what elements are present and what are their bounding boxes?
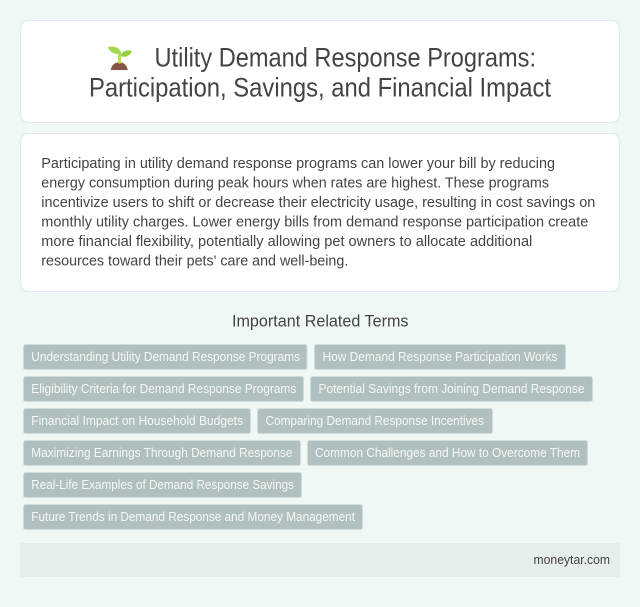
panel: related term tags (24, 344, 592, 530)
tag: potential savings (310, 376, 592, 402)
tag: eligibility criteria: Eligibility Criteria for Demand Response Programs (31, 381, 297, 396)
tag: maximizing earnings: Maximizing Earnings Through Demand Response (31, 445, 293, 460)
tag: real-life examples: Real-Life Examples of Demand Response Savings (31, 477, 294, 492)
title line 1: Utility Demand Response Programs: (154, 42, 536, 72)
tag: future trends: Future Trends in Demand Response and Money Management (31, 509, 355, 524)
description text block: resources toward their pets' care and well-being. (41, 252, 348, 270)
description text block: more financial flexibility, potentially allowing pet owners to allocate additional (41, 233, 532, 250)
tag: future trends (24, 504, 362, 530)
tag: common challenges (308, 440, 588, 466)
heading: important related terms: Important Related Terms (232, 312, 408, 330)
tag: common challenges: Common Challenges and How to Overcome Them (315, 445, 580, 460)
tag: understanding programs (24, 344, 307, 370)
description text block: energy consumption during peak hours when rates are highest. These programs (41, 174, 549, 192)
tag: comparing incentives (258, 408, 492, 434)
description text block (41, 155, 595, 270)
tag: financial impact: Financial Impact on Household Budgets (31, 413, 243, 428)
tag: financial impact (24, 408, 250, 434)
footer source text: moneytar.com (534, 552, 610, 567)
tag: eligibility criteria (24, 376, 304, 402)
tag: how participation works: How Demand Response Participation Works (322, 349, 558, 364)
panel: title card (20, 20, 620, 122)
panel: description card (20, 134, 620, 292)
tag: maximizing earnings (24, 440, 300, 466)
tag: understanding programs: Understanding Utility Demand Response Programs (31, 349, 300, 364)
tag: comparing incentives: Comparing Demand Response Incentives (266, 413, 484, 428)
tag: how participation works (314, 344, 566, 370)
description text block: monthly utility charges. Lower energy bills from demand response participation create (41, 214, 588, 230)
description text block: Participating in utility demand response programs can lower your bill by reducing (41, 155, 555, 172)
footer bar (20, 543, 620, 577)
tag: potential savings: Potential Savings from Joining Demand Response (318, 381, 584, 396)
title line 2: Participation, Savings, and Financial Impact (89, 72, 551, 102)
icon: seedling (108, 47, 132, 70)
tag: real-life examples (24, 472, 302, 498)
description text block: incentivize users to shift or decrease their electricity usage, resulting in cost savings on (41, 194, 595, 211)
